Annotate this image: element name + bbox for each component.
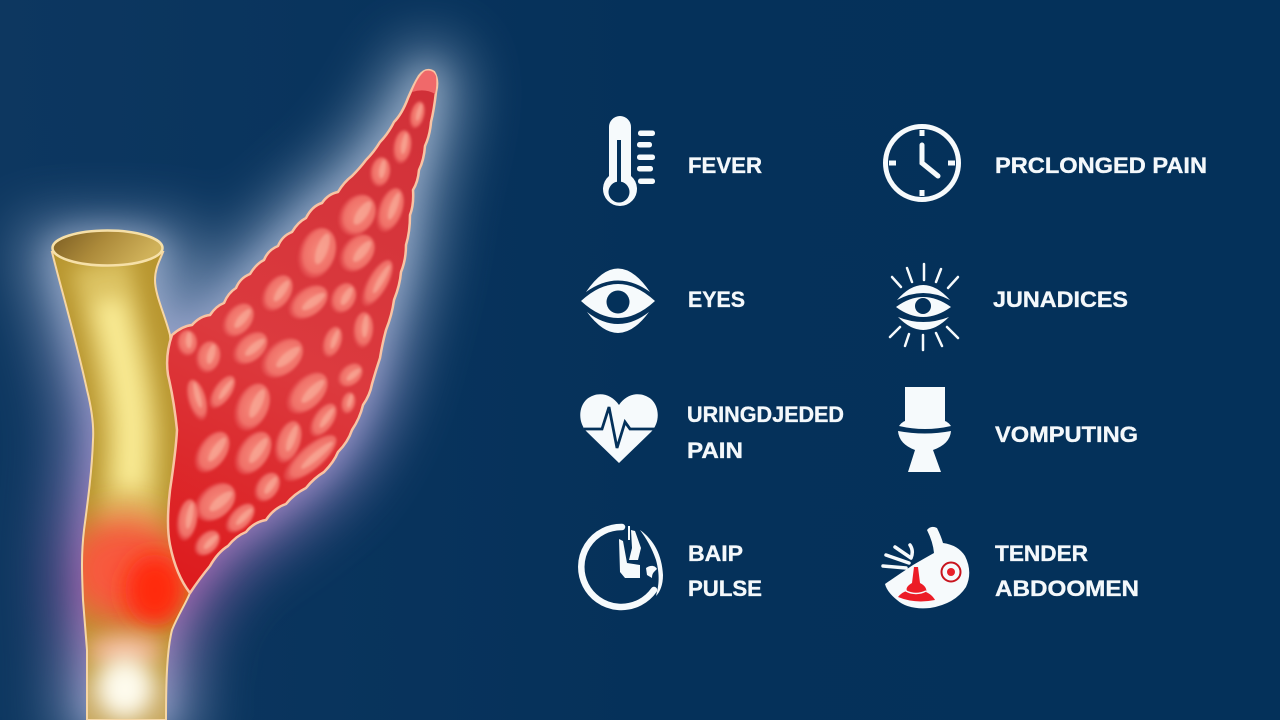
pancreas tip: [412, 71, 436, 94]
label: prolonged pain: PRCLONGED PAIN: [995, 153, 1207, 178]
icon: heart with pulse: [580, 394, 658, 463]
tender spot: [942, 562, 960, 582]
icon: toilet: [898, 387, 951, 472]
icon: thermometer: [603, 116, 655, 206]
duct tube: [52, 230, 190, 720]
symptom: uringded pain: [580, 394, 844, 463]
icon: clock with figure: [581, 526, 663, 607]
symptom: tender abdomen: [883, 527, 1139, 608]
panel: symptom list: [580, 116, 1207, 608]
symptom: fever: [603, 116, 762, 206]
icon: clock: [886, 126, 958, 200]
symptom: eyes: [581, 268, 745, 333]
duct opening: [52, 230, 162, 266]
label: baip pulse: BAIP: [688, 541, 743, 566]
label: vomiting: VOMPUTING: [995, 422, 1138, 447]
label: tender abdomen: TENDER: [995, 541, 1088, 566]
illustration: inflamed organ and duct: [47, 70, 437, 720]
label: fever: FEVER: [688, 153, 762, 178]
pancreas lobules: [174, 100, 427, 561]
symptom: baip pulse: [581, 526, 762, 607]
label: uringded pain: URINGDJEDED: [687, 402, 844, 427]
red pain cone: [898, 567, 935, 601]
icon: stomach: [883, 527, 969, 608]
symptom: vomiting: [898, 387, 1138, 472]
label: eyes: EYES: [688, 287, 745, 312]
icon: eye with rays: [890, 264, 958, 350]
label: jaundice: JUNADICES: [993, 287, 1128, 312]
symptom: baip pulse: PULSE: [688, 576, 762, 601]
pancreas body: [167, 70, 437, 593]
icon: eye: [581, 268, 655, 333]
symptom: jaundice: [890, 264, 1128, 350]
symptom: uringded pain: PAIN: [687, 438, 743, 463]
symptom: tender abdomen: ABDOOMEN: [995, 576, 1139, 601]
glow around organ: [47, 70, 437, 720]
symptom: prolonged pain: [886, 126, 1207, 200]
